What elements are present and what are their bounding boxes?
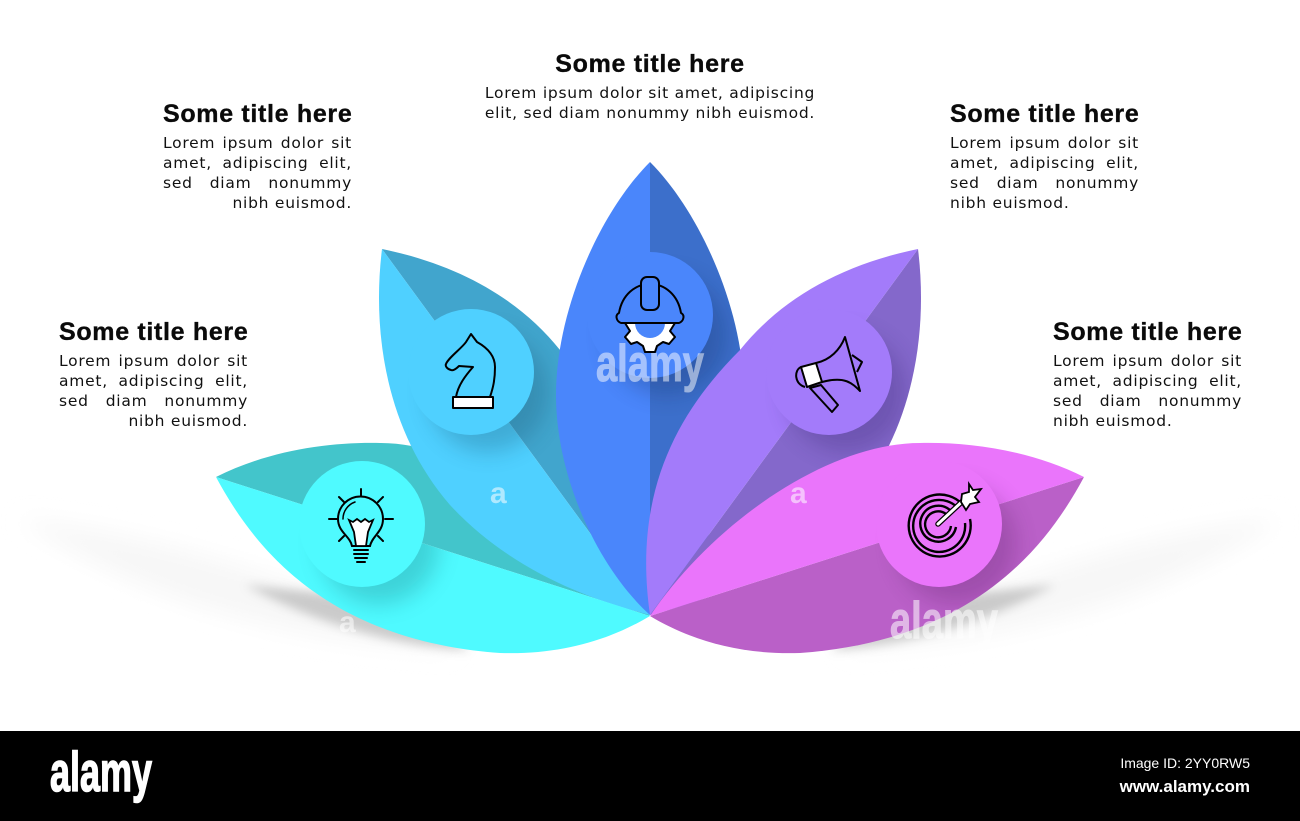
website: www.alamy.com [1119,777,1250,796]
heading: Some title here [950,100,1139,128]
icon: light bulb [329,489,393,562]
lotus diagram [216,162,1084,654]
heading: Some title here [163,100,352,128]
text block: top center [485,50,815,122]
body text [950,134,1139,212]
text block: lower right [1053,318,1242,430]
heading: Some title here [1053,318,1242,346]
petal 3 [556,162,744,615]
body text: Lorem ipsum dolor sit [1053,352,1242,370]
body text: nibh euismod. [128,412,248,430]
body text [59,352,248,430]
body text: nibh euismod. [950,194,1070,212]
body text: sed diam nonummy [59,392,248,410]
watermark: lower right: alamy [890,592,998,650]
body text: Lorem ipsum dolor sit [950,134,1139,152]
body text: sed diam nonummy [163,174,352,192]
body text: amet, adipiscing elit, [950,154,1139,172]
body text: Lorem ipsum dolor sit [163,134,352,152]
body text [485,84,815,122]
body text: amet, adipiscing elit, [59,372,248,390]
petal 2 [379,249,654,615]
petal 1 front half [216,461,650,653]
icon: megaphone [796,337,862,412]
image id: Image ID: 2YY0RW5 [1120,755,1250,771]
petal 5 [650,443,1084,653]
icon: chess knight [446,334,495,408]
watermark: small marks: a [490,477,507,510]
petal 4 [646,249,921,615]
petal 1 back half [216,443,650,616]
body text: amet, adipiscing elit, [1053,372,1242,390]
ground shadow [20,520,1280,651]
heading: Some title here [555,50,745,78]
text block: upper right [950,100,1139,212]
body text: Lorem ipsum dolor sit amet, adipiscing [485,84,815,102]
icon: target with arrow [909,484,981,557]
text block: lower left [59,318,248,430]
watermark: small marks [339,477,807,639]
body text: amet, adipiscing elit, [163,154,352,172]
body text: sed diam nonummy [1053,392,1242,410]
footer bar [0,731,1300,821]
watermark: center: alamy [596,335,704,393]
text block: upper left [163,100,352,212]
body text [163,134,352,212]
body text: nibh euismod. [232,194,352,212]
watermark: small marks: a [339,606,356,639]
body text: sed diam nonummy [950,174,1139,192]
body text: elit, sed diam nonummy nibh euismod. [485,104,815,122]
footer logo: alamy [50,740,152,803]
body text [1053,352,1242,430]
watermark: small marks: a [790,477,807,510]
body text: Lorem ipsum dolor sit [59,352,248,370]
icon: helmet and gear [617,277,683,352]
heading: Some title here [59,318,248,346]
body text: nibh euismod. [1053,412,1173,430]
